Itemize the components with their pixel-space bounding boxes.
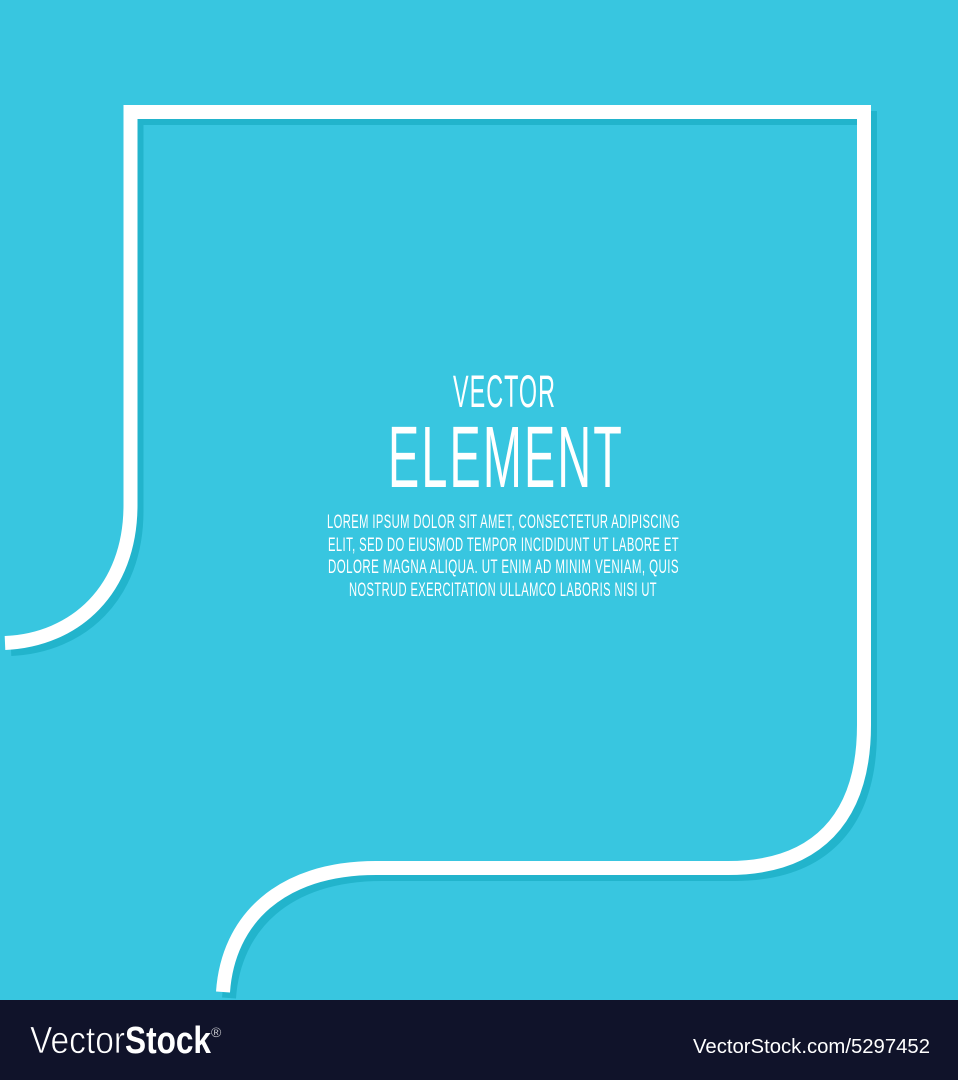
footer image id: VectorStock.com/5297452: [693, 1036, 930, 1058]
footer logo: VectorStock: Stock: [125, 1020, 212, 1062]
footer bar: [0, 1000, 958, 1080]
footer logo: VectorStock: Vector: [30, 1020, 125, 1062]
body text block: LOREM IPSUM DOLOR SIT AMET, CONSECTETUR ADIPISCING: [327, 512, 680, 533]
heading: vector: VECTOR: [453, 366, 556, 417]
body text block: [327, 512, 680, 601]
speech frame shadow: [11, 118, 870, 998]
footer logo: VectorStock: [30, 1020, 222, 1062]
heading: element: ELEMENT: [388, 409, 624, 506]
footer logo: VectorStock: ®: [211, 1024, 222, 1040]
body text block: DOLORE MAGNA ALIQUA. UT ENIM AD MINIM VENIAM, QUIS: [328, 557, 679, 578]
body text block: NOSTRUD EXERCITATION ULLAMCO LABORIS NISI UT: [349, 580, 657, 601]
speech frame outline: [5, 112, 864, 992]
body text block: ELIT, SED DO EIUSMOD TEMPOR INCIDIDUNT UT LABORE ET: [328, 535, 679, 556]
